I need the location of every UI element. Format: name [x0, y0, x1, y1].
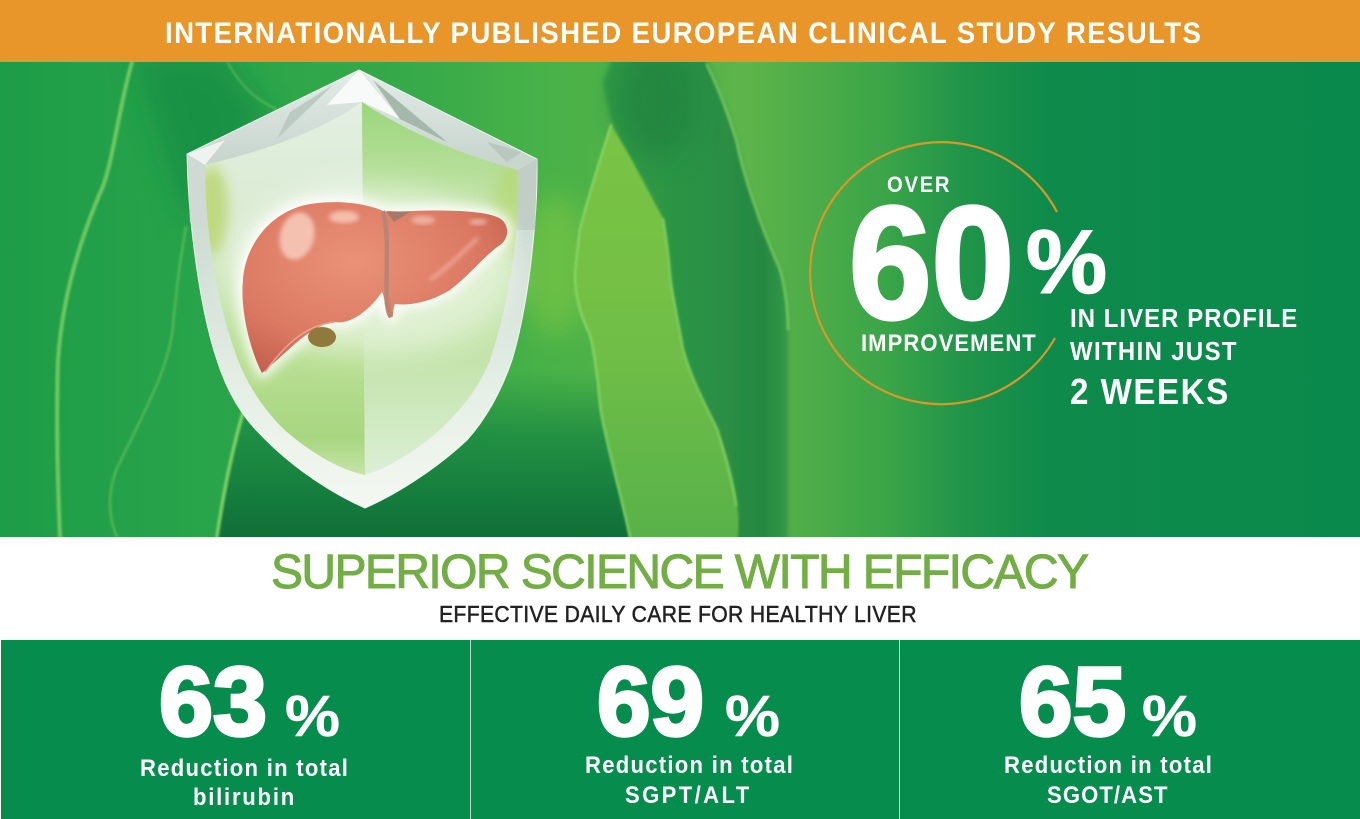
stat: bilirubin: 63 — [159, 647, 267, 756]
stat: SGOT/AST: Reduction in total — [1004, 751, 1212, 778]
stat: SGOT/AST — [1004, 647, 1212, 808]
callout: over 60% improvement: 60 — [849, 173, 1014, 352]
lime gap beside torso — [575, 125, 738, 540]
stat: SGOT/AST: 65 — [1019, 647, 1126, 756]
callout: over 60% improvement: 2 WEEKS — [1070, 373, 1228, 412]
shield rim — [187, 70, 537, 508]
shield right face — [362, 102, 518, 475]
callout: over 60% improvement: OVER — [887, 173, 950, 197]
right arm top shade — [606, 62, 691, 156]
panel: stats band — [1, 640, 1360, 819]
callout: over 60% improvement: WITHIN JUST — [1070, 337, 1237, 366]
callout: over 60% improvement — [810, 142, 1297, 412]
stat: SGOT/AST: SGOT/AST — [1047, 781, 1168, 808]
stat: SGPT/ALT: Reduction in total — [585, 751, 793, 778]
stat: bilirubin: bilirubin — [193, 783, 294, 810]
hero panel: body silhouette background — [0, 40, 1360, 545]
orange arc — [810, 142, 1057, 404]
stat: SGPT/ALT: SGPT/ALT — [625, 781, 749, 808]
callout: over 60% improvement: IN LIVER PROFILE — [1070, 304, 1297, 333]
liver glow — [227, 185, 517, 373]
stat: SGPT/ALT: % — [725, 684, 780, 749]
icon: liver — [242, 202, 507, 373]
callout: over 60% improvement: IMPROVEMENT — [861, 329, 1036, 356]
body contour glow lines — [57, 62, 788, 537]
stat: SGOT/AST: % — [1142, 684, 1197, 749]
stat: SGPT/ALT — [585, 647, 793, 808]
heading: SUPERIOR SCIENCE WITH EFFICACY — [271, 546, 1089, 599]
stat: SGPT/ALT: 69 — [597, 647, 704, 756]
torso — [217, 383, 630, 537]
top banner: INTERNATIONALLY PUBLISHED EUROPEAN CLINICAL STUDY RESULTS — [165, 17, 1201, 50]
gallbladder — [308, 327, 336, 347]
stat: bilirubin: % — [285, 684, 340, 749]
lime tint corners — [196, 165, 526, 255]
glow beside lime — [523, 190, 583, 340]
callout: over 60% improvement: % — [1026, 213, 1107, 313]
stat: bilirubin: Reduction in total — [140, 754, 348, 781]
top banner — [0, 0, 1360, 62]
stat: bilirubin — [140, 647, 348, 810]
rim facets — [187, 70, 537, 230]
icon: glass shield — [187, 70, 537, 508]
right arm — [603, 58, 788, 540]
shield left face — [205, 102, 365, 475]
dark wedge above left arm — [142, 62, 272, 220]
subheading: EFFECTIVE DAILY CARE FOR HEALTHY LIVER — [439, 601, 916, 627]
